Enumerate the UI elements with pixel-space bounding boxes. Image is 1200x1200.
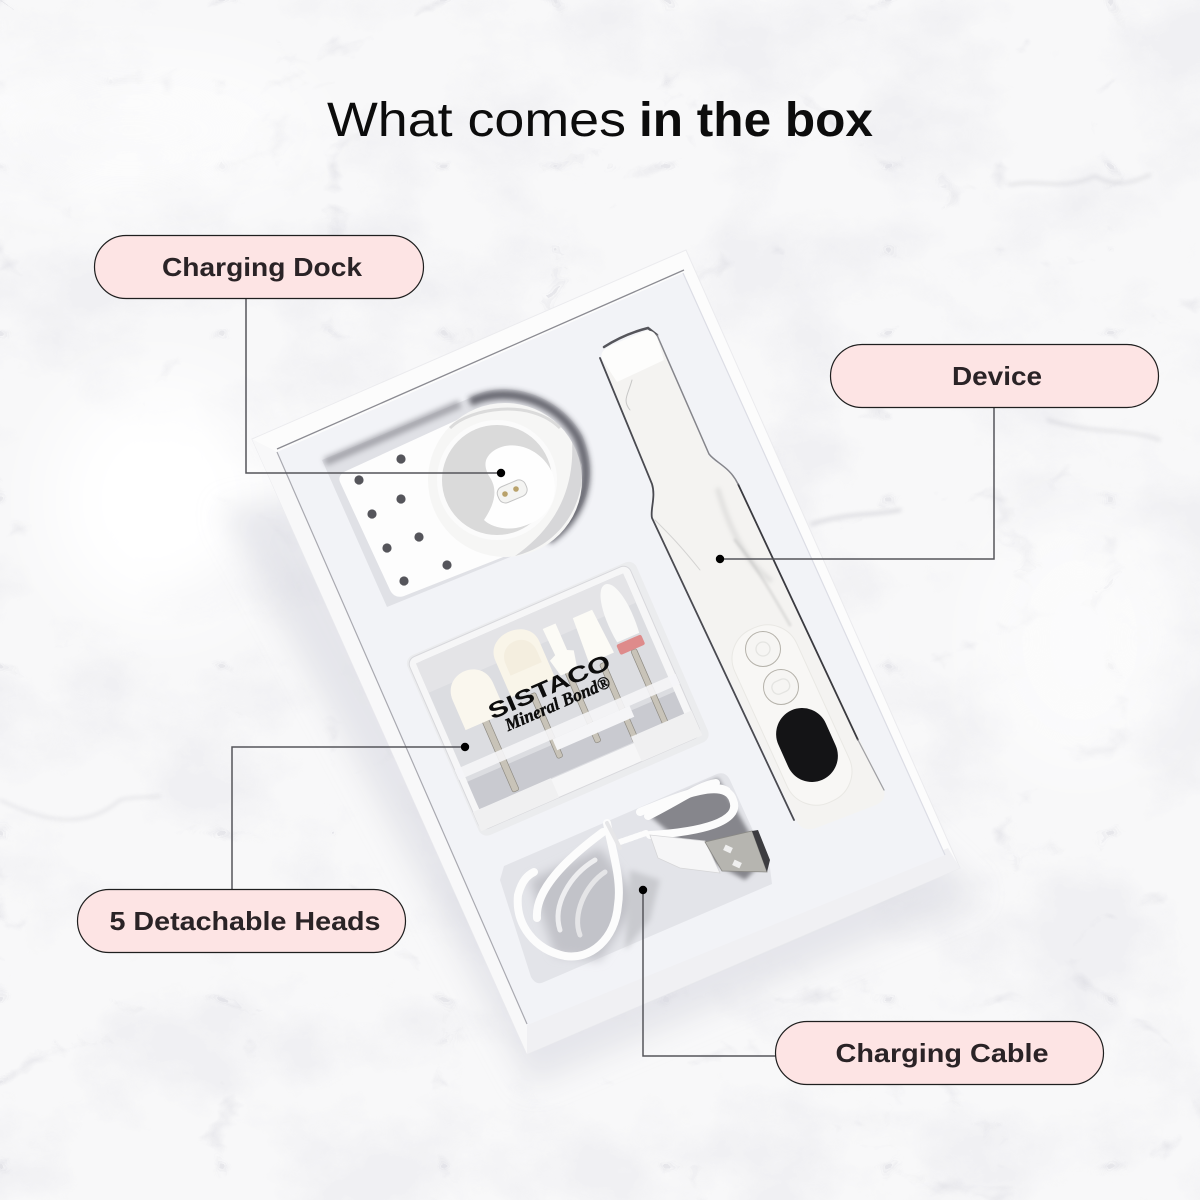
label: 5 Detachable Heads: 5 Detachable Heads [110, 906, 380, 936]
logo text: SISTACO [484, 649, 614, 724]
cable compartment [500, 773, 772, 983]
dock round cradle [428, 403, 582, 557]
label: Device: Device [952, 361, 1042, 391]
label: Charging Cable [776, 1022, 1104, 1084]
gift box with tray [252, 250, 960, 1054]
device control panel [722, 614, 862, 816]
title [327, 94, 873, 147]
title: in the box [639, 94, 873, 147]
cable loops [518, 783, 734, 957]
charging dock in its well [322, 389, 590, 607]
label: Charging Dock: Charging Dock [162, 252, 363, 282]
detachable heads [435, 579, 680, 804]
heads case [404, 559, 711, 839]
device [600, 328, 885, 829]
label: Charging Dock [94, 236, 424, 298]
device display [768, 700, 846, 790]
logo text [484, 649, 621, 739]
dock well [322, 389, 590, 607]
device edge shadow [600, 328, 884, 820]
connector: heads [232, 743, 469, 889]
label: Device [830, 344, 1158, 408]
label: Charging Cable: Charging Cable [836, 1038, 1048, 1068]
lid band [455, 674, 680, 780]
connector: cable [639, 886, 775, 1056]
connector: charging dock [246, 298, 505, 477]
logo text: Mineral Bond® [501, 672, 613, 735]
USB plug [650, 830, 770, 873]
box outer frame [252, 250, 960, 1054]
box shadow on table [222, 500, 980, 1085]
device cap [601, 331, 664, 382]
tray insert [277, 273, 945, 1025]
dock plate with holes [339, 405, 530, 597]
title: What comes [327, 94, 626, 147]
connector: device [716, 408, 994, 563]
label: 5 Detachable Heads [78, 890, 406, 952]
